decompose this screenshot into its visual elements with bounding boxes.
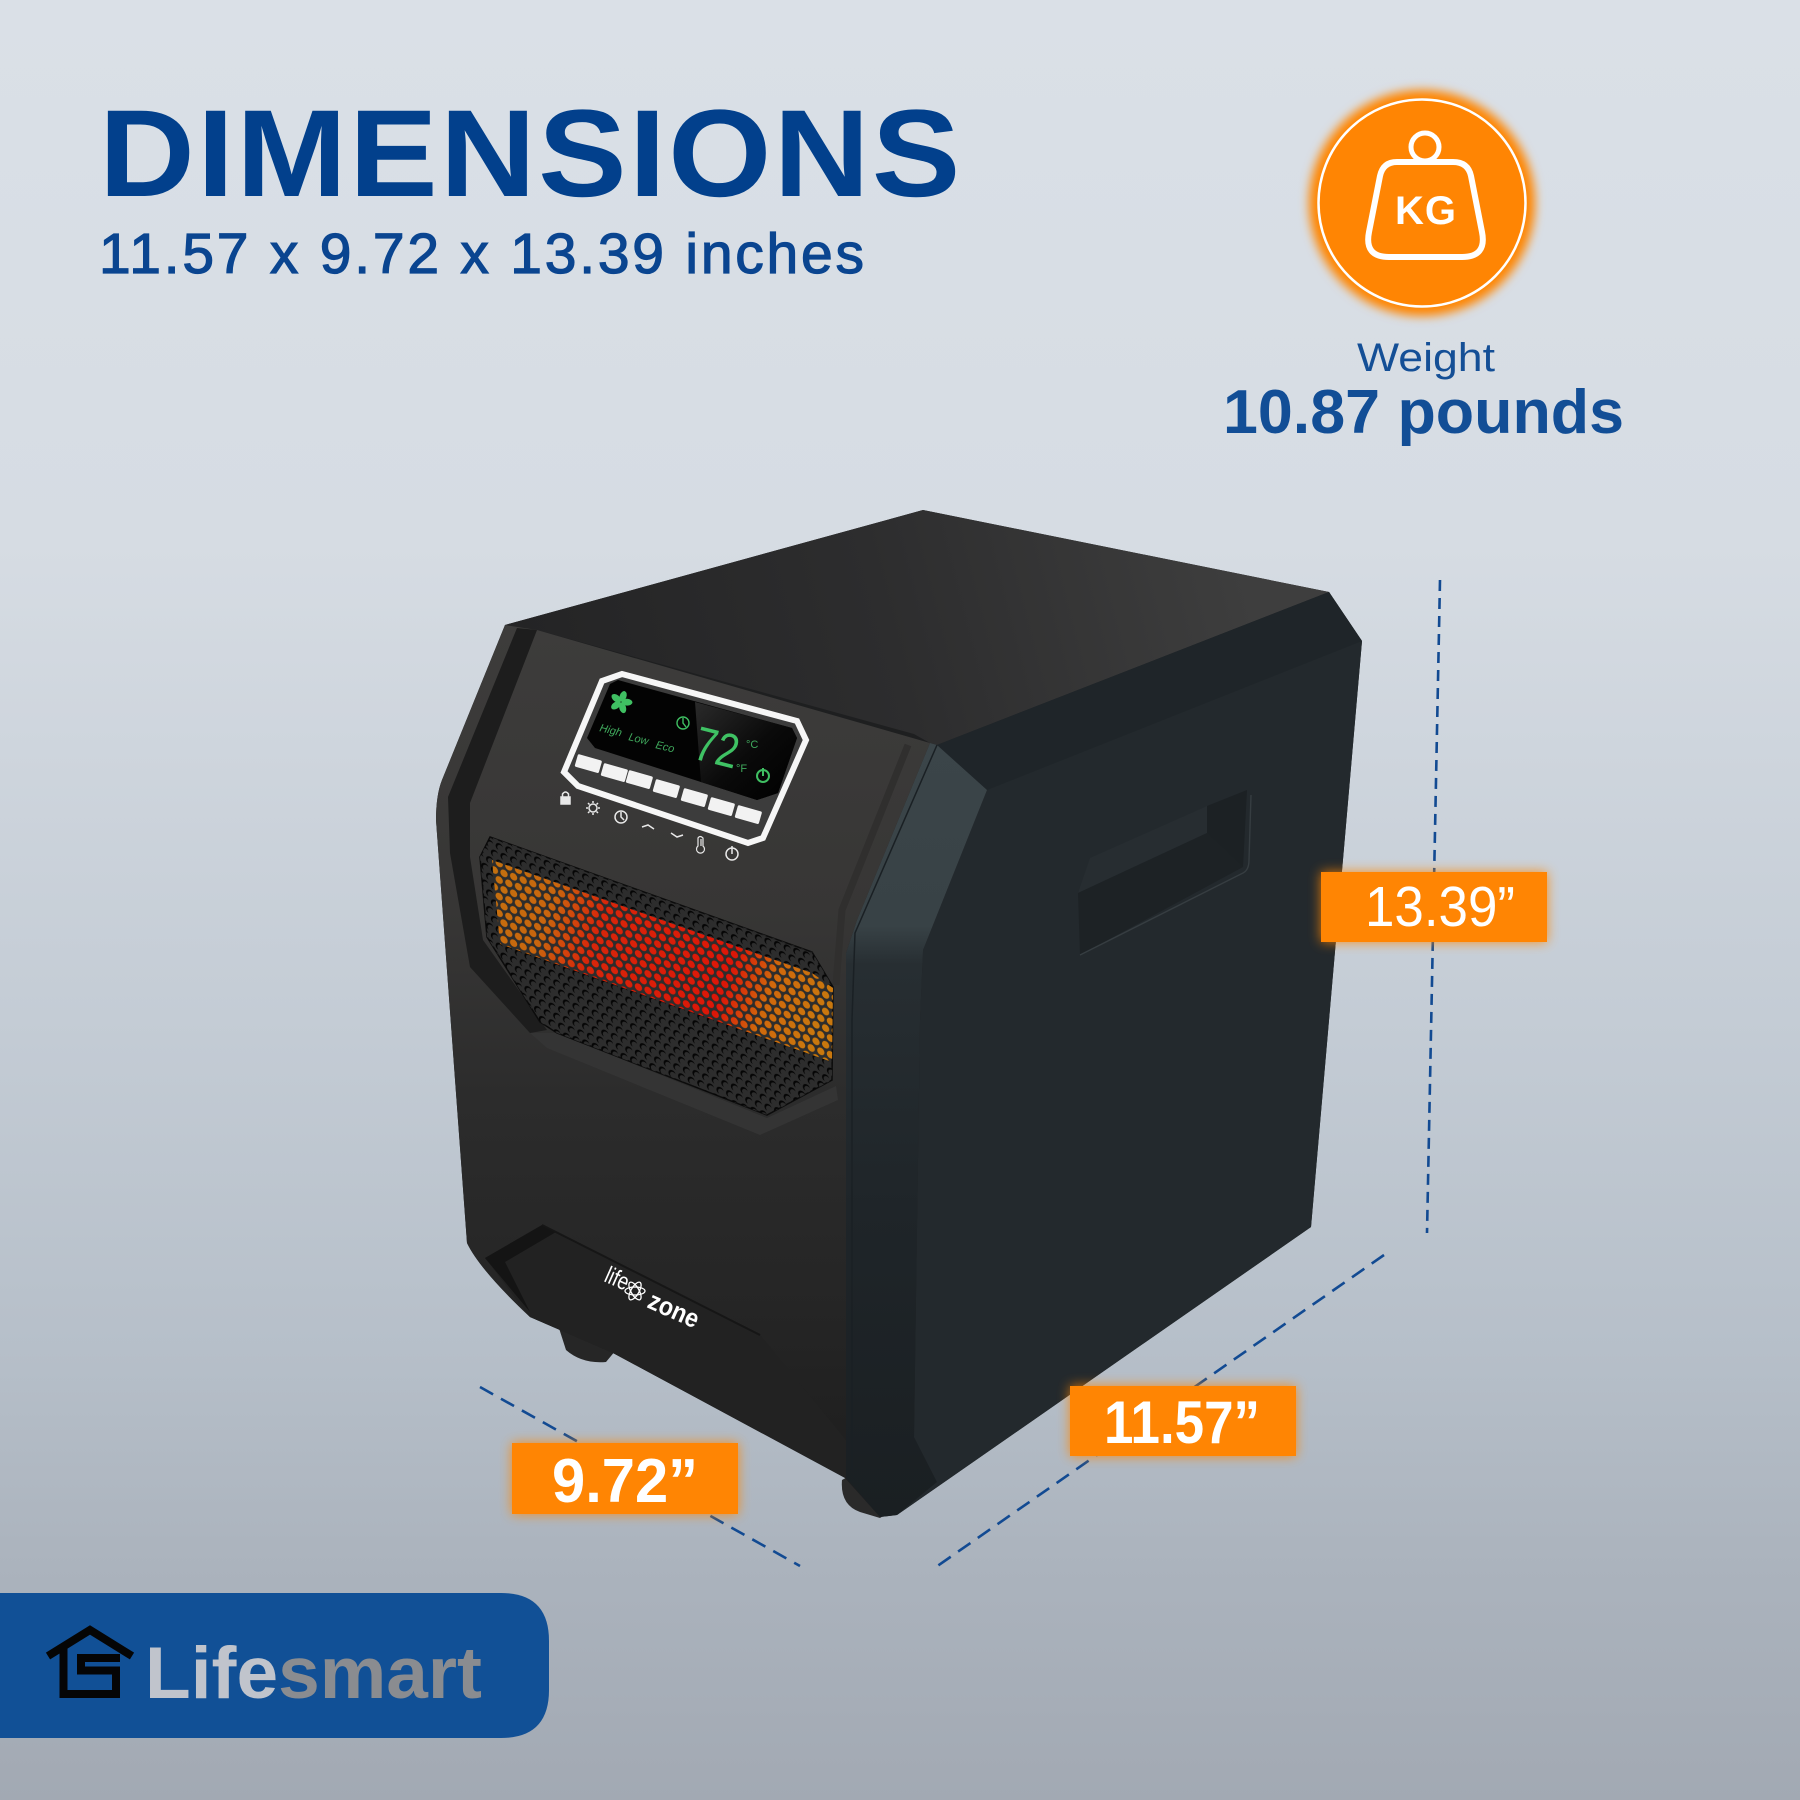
brand logo on heater: zone [644, 1285, 704, 1334]
weight label: Weight [1357, 336, 1495, 380]
button function icons [561, 792, 738, 860]
corner chamfer [846, 743, 987, 1517]
icon: display power [757, 768, 769, 782]
side top chamfer [937, 592, 1362, 790]
front face [436, 625, 930, 1478]
fan speed labels: High [598, 722, 623, 739]
label: width: 9.72” [552, 1447, 698, 1516]
icon: weight badge: KG [1395, 189, 1457, 233]
unit labels: °C [746, 739, 758, 751]
heater feet [557, 1322, 900, 1518]
temperature readout: 72 [689, 717, 744, 779]
label: height: 13.39” [1365, 875, 1515, 939]
brand logo on heater [601, 1262, 704, 1334]
label: height [1321, 872, 1547, 942]
icon: weight badge [1309, 90, 1535, 316]
chamfer seam [852, 745, 937, 1470]
heater product [436, 510, 1362, 1518]
heater silhouette [436, 510, 1362, 1517]
dimension line: width [480, 1387, 800, 1566]
dimension line: height [1427, 580, 1440, 1233]
fan speed labels: Eco [654, 739, 676, 755]
fan speed labels: Low [627, 731, 651, 748]
brand wordmark: Lifesmart [145, 1633, 482, 1714]
grill lower lip [530, 1033, 838, 1135]
weight value: 10.87 pounds [1223, 378, 1624, 447]
dimension line: depth [936, 1255, 1384, 1567]
display glare [695, 702, 797, 800]
title: DIMENSIONS [99, 85, 960, 223]
brand logo on heater: life [601, 1262, 633, 1296]
label: depth: 11.57” [1104, 1389, 1260, 1456]
unit labels: °F [736, 763, 747, 775]
carrying handle recess [1078, 790, 1251, 955]
brand pill [0, 1593, 549, 1738]
fan speed labels [598, 722, 676, 755]
icon: timer [677, 717, 689, 729]
heater side face [897, 592, 1362, 1515]
icon: fan [610, 690, 633, 714]
front shadow band [836, 745, 908, 985]
heater top face [505, 510, 1329, 745]
panel buttons [575, 754, 762, 824]
subtitle: overall dimensions: 11.57 x 9.72 x 13.39 inches [99, 222, 864, 286]
panel frame [564, 674, 806, 843]
base recess [485, 1225, 846, 1478]
unit labels [736, 739, 758, 775]
label: width [512, 1443, 738, 1516]
icon: house logo [48, 1630, 132, 1694]
display screen [587, 680, 797, 800]
front left rim [448, 628, 547, 1033]
heating grill [480, 837, 833, 1115]
control panel [561, 674, 806, 860]
